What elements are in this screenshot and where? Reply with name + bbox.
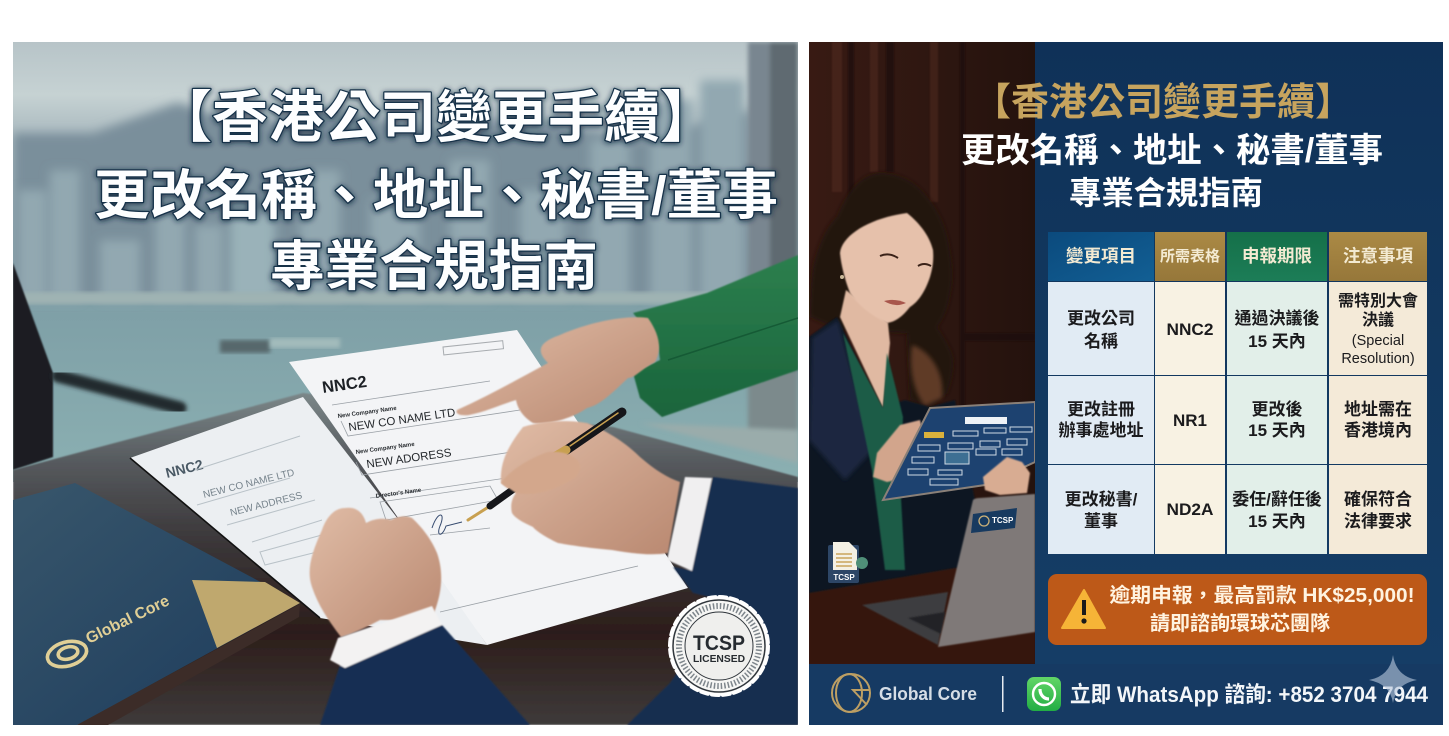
footer bar (809, 655, 1443, 725)
row: company name: 通過決議後 (1234, 308, 1320, 328)
row: company name: NNC2 (1166, 320, 1214, 339)
field label: address: New Company Name (355, 442, 416, 456)
document icon (828, 542, 868, 583)
header row: 變更項目 (1066, 246, 1136, 266)
title: left: 【香港公司變更手續】 (156, 86, 716, 149)
thumb over pen (500, 451, 570, 494)
header row (1048, 232, 1427, 281)
neck and chest (840, 290, 890, 408)
title: left (94, 86, 778, 297)
row: registered address: 地址需在 (1344, 400, 1412, 419)
row: company name: 需特別大會 (1338, 291, 1418, 310)
left hand (310, 508, 441, 637)
row: secretary or director: 董事 (1084, 512, 1118, 531)
tablet flowchart (908, 417, 1032, 485)
row: registered address (1048, 376, 1427, 464)
row: secretary or director (1048, 465, 1427, 554)
office chair (13, 263, 180, 470)
blazer lapel (809, 320, 873, 480)
contact text: 立即 WhatsApp 諮詢: +852 3704 7944 (1070, 682, 1429, 707)
wood panelling (809, 42, 1035, 664)
harbour window view (13, 42, 798, 482)
title: left: 更改名稱、地址、秘書/董事 (94, 166, 778, 226)
laptop lid (938, 494, 1035, 647)
divider (1002, 676, 1004, 712)
writing arm sleeve (627, 477, 798, 725)
back form title: NNC2 (164, 456, 205, 481)
title: right (961, 82, 1383, 211)
folder logo (46, 640, 88, 668)
title: left: 專業合規指南 (270, 237, 598, 297)
pointing hand (457, 317, 659, 423)
brand name: Global Core (879, 684, 977, 704)
facial features (840, 254, 931, 305)
icon: WhatsApp (1027, 677, 1061, 711)
header row: 所需表格 (1160, 247, 1220, 265)
penalty text (1110, 583, 1414, 635)
writing hand (501, 421, 680, 554)
field value: company name: NEW CO NAME LTD (348, 407, 456, 434)
row: secretary or director: ND2A (1166, 500, 1214, 519)
left sleeve and cuff (320, 606, 530, 725)
row: company name (1048, 282, 1427, 375)
navy background (1035, 42, 1443, 664)
header row: 申報期限 (1242, 246, 1312, 266)
field value: address: NEW ADORESS (366, 447, 453, 471)
row: registered address: 15 天內 (1248, 421, 1306, 440)
row: secretary or director: 法律要求 (1344, 512, 1412, 531)
penalty text: 逾期申報，最高罰款 HK$25,000! (1110, 583, 1414, 607)
row: company name: 更改公司 (1067, 309, 1135, 328)
title: right: 更改名稱、地址、秘書/董事 (961, 132, 1383, 170)
window frame (640, 42, 798, 463)
row: secretary or director: 更改秘書/ (1065, 489, 1138, 509)
laptop badge (971, 508, 1017, 533)
hair (810, 173, 953, 407)
tablet (883, 402, 1035, 500)
writing hand on tablet (873, 420, 925, 482)
row: company name: 15 天內 (1248, 332, 1306, 351)
row: registered address: 香港境內 (1344, 420, 1412, 440)
logo: Global Core (832, 674, 870, 712)
desk (13, 393, 798, 725)
callout: late filing penalty (1048, 574, 1427, 645)
row: company name: 決議 (1362, 311, 1394, 329)
row: company name: (Special (1352, 333, 1404, 349)
title: right: 【香港公司變更手續】 (973, 82, 1353, 124)
photo: woman at desk (809, 42, 1035, 664)
panel: right poster (809, 42, 1443, 725)
seal text: TCSP (693, 632, 745, 655)
fingers holding tablet (983, 457, 1030, 495)
row: company name: Resolution) (1341, 351, 1415, 367)
laptop lid: TCSP (992, 516, 1014, 525)
row: registered address: 更改後 (1252, 400, 1302, 419)
document icon: TCSP (833, 573, 855, 582)
table: filing requirements (1048, 232, 1427, 554)
row: registered address: NR1 (1173, 411, 1207, 430)
gold corner (192, 580, 300, 648)
front form NNC2 (289, 330, 688, 645)
row: secretary or director: 委任/辭任後 (1232, 489, 1322, 509)
face (840, 213, 933, 323)
icon: warning triangle (1062, 590, 1105, 628)
field label: company name: New Company Name (337, 406, 398, 420)
row: secretary or director: 確保符合 (1344, 489, 1412, 509)
seal: TCSP licensed: LICENSED (693, 654, 745, 665)
green sleeve (633, 255, 798, 417)
penalty text: 請即諮詢環球芯團隊 (1150, 612, 1330, 635)
back form field: name: NEW CO NAME LTD (202, 468, 296, 501)
pen (468, 412, 622, 520)
row: secretary or director: 15 天內 (1248, 512, 1306, 531)
panel: left photo (13, 42, 798, 725)
signature (432, 515, 462, 534)
folder with Global Core logo (13, 483, 300, 725)
form stamp box (443, 341, 504, 355)
laptop keyboard (862, 592, 948, 645)
sparkle watermark (1369, 655, 1417, 703)
desk (809, 568, 1035, 664)
form title: NNC2 (321, 373, 368, 397)
back form (130, 397, 487, 645)
blazer (809, 317, 975, 600)
seal: TCSP licensed (670, 597, 768, 695)
title: right: 專業合規指南 (1069, 175, 1263, 211)
row: company name: 名稱 (1084, 332, 1118, 351)
back form field: address: NEW ADDRESS (229, 490, 304, 519)
header row: 注意事項 (1343, 246, 1413, 266)
row: registered address: 更改註冊 (1067, 399, 1135, 419)
folder brand name: Global Core (83, 593, 172, 648)
green blouse (843, 333, 905, 570)
hair lights (911, 345, 942, 406)
row: registered address: 辦事處地址 (1058, 421, 1144, 440)
field label: director: Director's Name (375, 488, 422, 500)
